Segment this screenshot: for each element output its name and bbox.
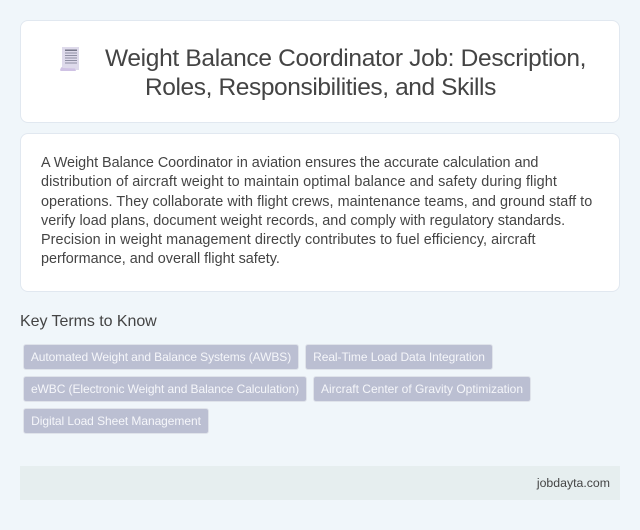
tag: real-time load data <box>305 344 493 370</box>
description text: verify load plans, document weight records, and comply with regulatory standards. <box>41 213 565 229</box>
description text: distribution of aircraft weight to maintain optimal balance and safety during flight <box>41 174 557 190</box>
description text <box>41 155 592 267</box>
footer text: jobdayta.com <box>537 476 610 490</box>
tag: center of gravity <box>313 376 531 402</box>
tag: eWBC <box>23 376 307 402</box>
tag: center of gravity: Aircraft Center of Gravity Optimization <box>321 382 523 396</box>
title: Roles, Responsibilities, and Skills <box>145 74 496 101</box>
description text: performance, and overall flight safety. <box>41 251 280 267</box>
title: Weight Balance Coordinator Job: Description, <box>105 45 586 72</box>
heading: key terms: Key Terms to Know <box>20 313 157 330</box>
panel: description card <box>20 133 620 292</box>
tag: digital load sheet: Digital Load Sheet Management <box>31 414 201 428</box>
panel: title card <box>20 20 620 123</box>
description text: Precision in weight management directly contributes to fuel efficiency, aircraft <box>41 232 536 248</box>
tag: real-time load data: Real-Time Load Data Integration <box>313 350 485 364</box>
term tags <box>23 344 531 434</box>
tag: digital load sheet <box>23 408 209 434</box>
tag: AWBS <box>23 344 299 370</box>
description text: A Weight Balance Coordinator in aviation ensures the accurate calculation and <box>41 155 538 171</box>
title <box>105 45 586 101</box>
tag: AWBS: Automated Weight and Balance Systems (AWBS) <box>31 350 291 364</box>
tag: eWBC: eWBC (Electronic Weight and Balance Calculation) <box>31 382 299 396</box>
footer bar <box>20 466 620 500</box>
description text: operations. They collaborate with flight crews, maintenance teams, and ground staff to <box>41 194 592 210</box>
icon: paper scroll document <box>60 47 79 71</box>
